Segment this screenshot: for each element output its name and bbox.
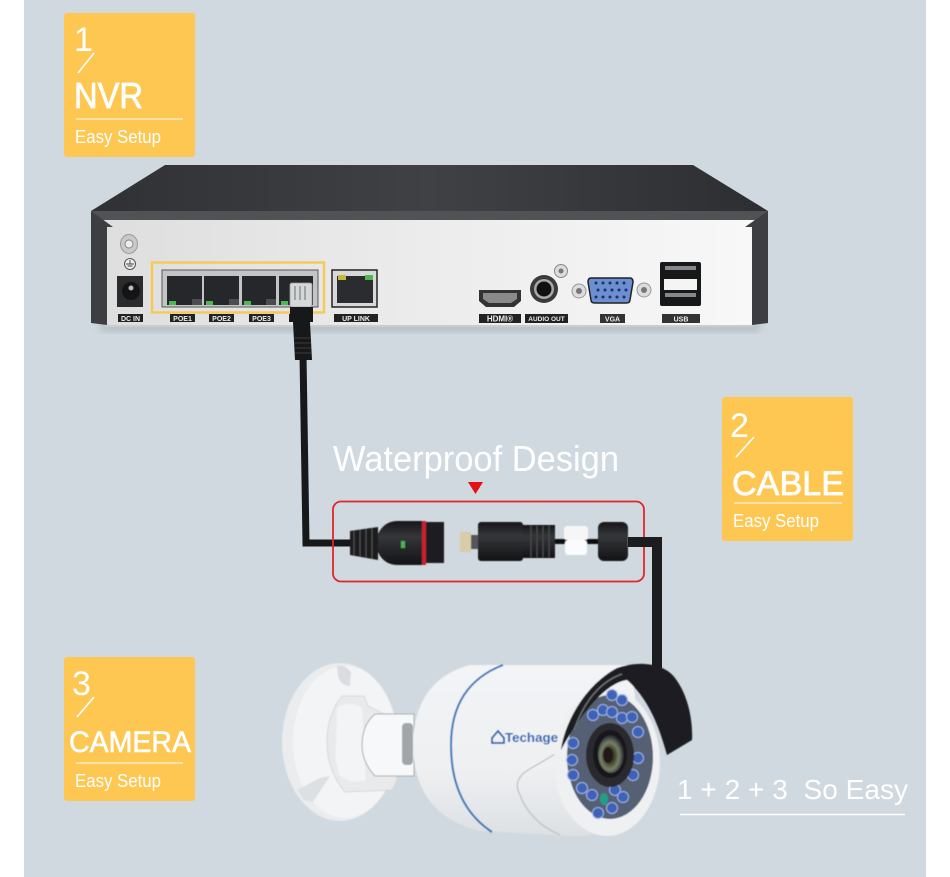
white seal <box>564 526 588 555</box>
heading: Waterproof Design: Waterproof Design <box>333 438 619 479</box>
card: step 1 NVR: NVR <box>74 75 143 116</box>
card: step 2 cable: CABLE <box>732 465 844 503</box>
labels: PoE ports: POE3 <box>252 316 271 323</box>
network cable: NVR to connector <box>303 355 352 543</box>
camera front rim <box>554 688 660 836</box>
bullet camera <box>282 663 692 836</box>
card: step 1 NVR <box>64 13 195 157</box>
labels: PoE ports: POE1 <box>173 316 192 323</box>
label: VGA: VGA <box>605 316 620 324</box>
labels: PoE ports <box>170 314 313 323</box>
NVR recorder <box>91 165 768 332</box>
VGA port <box>572 278 651 303</box>
connector cap <box>598 522 628 561</box>
audio jack <box>530 264 568 303</box>
label: DC IN: DC IN <box>121 316 140 323</box>
connector female end <box>350 521 444 565</box>
camera lens <box>586 723 634 787</box>
label: VGA <box>600 314 625 324</box>
ground screw <box>120 234 138 270</box>
status LED <box>600 793 608 805</box>
camera body <box>413 665 650 836</box>
label: HDMI: HDMI® <box>487 314 513 324</box>
HDMI port <box>479 290 521 307</box>
labels: PoE ports: POE2 <box>212 316 231 323</box>
red highlight box <box>333 502 644 582</box>
label: DC IN <box>118 314 143 323</box>
infrared LEDs <box>566 690 644 818</box>
slogan: 1 + 2 + 3 So Easy: 1 + 2 + 3 So Easy <box>677 774 908 805</box>
label: AUDIO OUT: AUDIO OUT <box>528 316 565 323</box>
label: UP LINK <box>334 314 378 323</box>
uplink port <box>332 270 377 307</box>
red pointer <box>468 482 483 494</box>
camera lower seam <box>517 750 562 835</box>
Techage logo: Techage <box>505 731 558 745</box>
card: step 3 camera: 3 <box>72 665 91 703</box>
NVR rear face <box>105 220 753 326</box>
camera wall mount <box>282 663 414 821</box>
card: step 3 camera: CAMERA <box>69 726 191 759</box>
connector gland <box>478 522 600 561</box>
NVR top cover <box>91 165 768 211</box>
camera faceplate <box>567 695 653 819</box>
RJ45 plug <box>290 283 313 360</box>
card: step 2 cable: Easy Setup <box>733 511 819 531</box>
card: step 2 cable: 2 <box>730 407 749 445</box>
camera sun hood <box>561 664 692 755</box>
camera blue ring <box>451 665 503 832</box>
card: step 3 camera <box>64 657 195 801</box>
yellow highlight box <box>152 262 324 312</box>
NVR side brackets <box>91 211 113 325</box>
DC IN jack <box>117 276 143 307</box>
PoE port group <box>162 270 318 307</box>
card: step 2 cable <box>722 397 853 541</box>
label: HDMI <box>479 314 521 324</box>
label: UP LINK: UP LINK <box>342 316 370 323</box>
label: USB: USB <box>674 316 688 324</box>
card: step 1 NVR: 1 <box>74 21 93 59</box>
card: step 1 NVR: Easy Setup <box>75 127 161 147</box>
USB ports <box>660 262 701 306</box>
NVR shadow <box>100 322 760 332</box>
network cable: connector to camera <box>628 542 657 668</box>
waterproof connector <box>350 521 628 565</box>
label: USB <box>662 314 700 324</box>
connector RJ45 tip <box>460 532 478 552</box>
card: step 3 camera: Easy Setup <box>75 771 161 791</box>
label: AUDIO OUT <box>525 314 568 323</box>
